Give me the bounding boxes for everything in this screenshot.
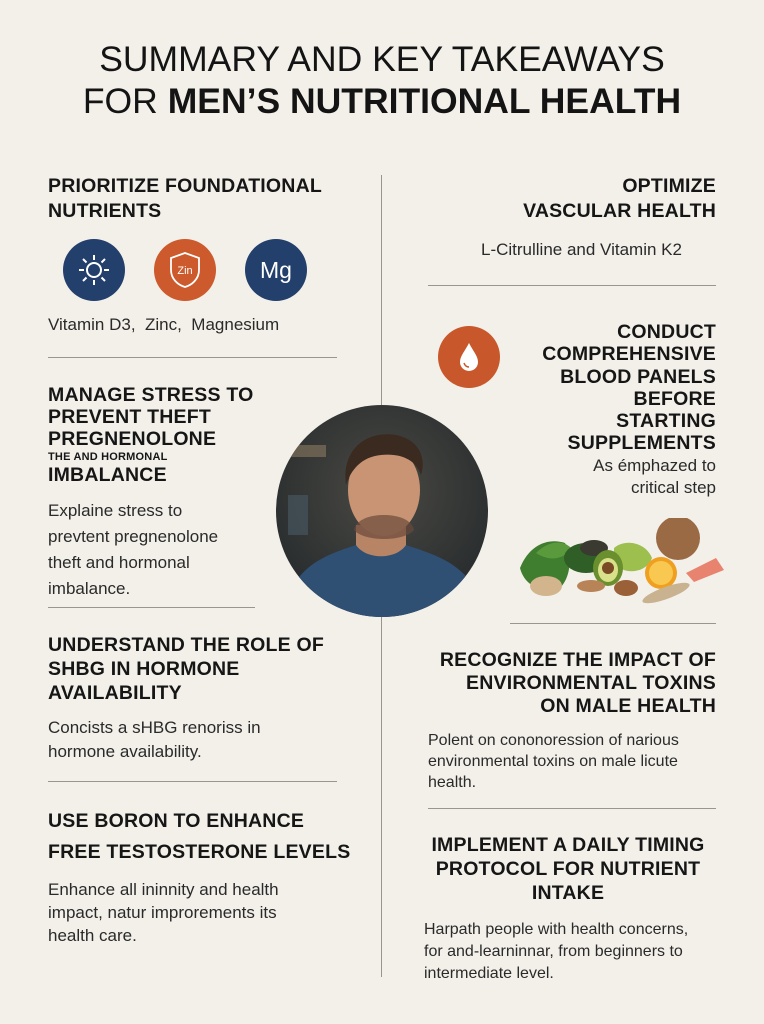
icon: magnesium bbox=[245, 239, 307, 301]
heading: ON MALE HEALTH bbox=[540, 695, 716, 717]
panel: daily timing bbox=[424, 834, 705, 982]
panel: manage stress bbox=[48, 384, 253, 598]
text: health. bbox=[428, 774, 476, 791]
icon: zinc bbox=[154, 239, 216, 301]
heading bbox=[440, 649, 716, 717]
text bbox=[48, 501, 218, 598]
text: critical step bbox=[631, 478, 716, 497]
text: Vitamin D3, Zinc, Magnesium bbox=[48, 315, 279, 334]
heading: RECOGNIZE THE IMPACT OF bbox=[440, 649, 716, 671]
text: theft and hormonal bbox=[48, 553, 190, 572]
heading bbox=[48, 810, 350, 863]
title bbox=[83, 39, 681, 121]
heading: AVAILABILITY bbox=[48, 682, 182, 704]
text: imbalance. bbox=[48, 579, 130, 598]
heading: BEFORE bbox=[634, 388, 716, 410]
heading: STARTING bbox=[616, 410, 716, 432]
text: L-Citrulline and Vitamin K2 bbox=[481, 240, 682, 259]
heading bbox=[431, 834, 705, 904]
icon: zinc: Zin bbox=[177, 265, 193, 277]
center divider bbox=[381, 175, 382, 977]
panel: foundational nutrients bbox=[48, 175, 322, 334]
heading: USE BORON TO ENHANCE bbox=[48, 810, 304, 832]
heading bbox=[523, 175, 716, 222]
panel: SHBG bbox=[48, 634, 324, 761]
heading: COMPREHENSIVE bbox=[542, 343, 716, 365]
text: Explaine stress to bbox=[48, 501, 182, 520]
text bbox=[48, 718, 261, 761]
heading: OPTIMIZE bbox=[622, 175, 716, 197]
heading: CONDUCT bbox=[617, 321, 716, 343]
heading bbox=[48, 634, 324, 704]
text: environmental toxins on male licute bbox=[428, 753, 678, 770]
heading: THE AND HORMONAL bbox=[48, 451, 168, 463]
text bbox=[428, 732, 679, 791]
text bbox=[593, 456, 716, 497]
heading: PROTOCOL FOR NUTRIENT bbox=[436, 858, 700, 880]
heading: ENVIRONMENTAL TOXINS bbox=[466, 672, 716, 694]
text: As émphazed to bbox=[593, 456, 716, 475]
icon: sun bbox=[63, 239, 125, 301]
heading: PRIORITIZE FOUNDATIONAL bbox=[48, 175, 322, 197]
heading: FREE TESTOSTERONE LEVELS bbox=[48, 841, 350, 863]
panel: boron bbox=[48, 810, 350, 945]
panel: environmental toxins bbox=[428, 649, 716, 791]
text: health care. bbox=[48, 926, 137, 945]
title: SUMMARY AND KEY TAKEAWAYS bbox=[99, 39, 665, 79]
food image bbox=[520, 518, 724, 604]
photo: man portrait bbox=[276, 405, 488, 617]
heading: UNDERSTAND THE ROLE OF bbox=[48, 634, 324, 656]
title: FOR MEN’S NUTRITIONAL HEALTH bbox=[83, 81, 681, 121]
icon: blood drop bbox=[438, 326, 500, 388]
heading: INTAKE bbox=[532, 882, 604, 904]
text: intermediate level. bbox=[424, 965, 554, 982]
heading: MANAGE STRESS TO bbox=[48, 384, 253, 406]
heading: VASCULAR HEALTH bbox=[523, 200, 716, 222]
text: prevtent pregnenolone bbox=[48, 527, 218, 546]
text: Polent on cononoression of narious bbox=[428, 732, 679, 749]
heading bbox=[48, 175, 322, 222]
heading: IMPLEMENT A DAILY TIMING bbox=[431, 834, 705, 856]
heading: SUPPLEMENTS bbox=[568, 432, 716, 454]
heading: SHBG IN HORMONE bbox=[48, 658, 240, 680]
text: for and-learninnar, from beginners to bbox=[424, 943, 683, 960]
icon: magnesium: Mg bbox=[260, 256, 292, 282]
heading bbox=[48, 384, 253, 486]
text: hormone availability. bbox=[48, 742, 202, 761]
text bbox=[48, 880, 279, 945]
heading: IMBALANCE bbox=[48, 464, 167, 486]
text: Enhance all ininnity and health bbox=[48, 880, 279, 899]
heading bbox=[542, 321, 716, 454]
heading: PREVENT THEFT bbox=[48, 406, 211, 428]
text: Harpath people with health concerns, bbox=[424, 921, 688, 938]
heading: BLOOD PANELS bbox=[560, 366, 716, 388]
text: Concists a sHBG renoriss in bbox=[48, 718, 261, 737]
text bbox=[424, 921, 688, 982]
panel: vascular health bbox=[481, 175, 716, 259]
heading: NUTRIENTS bbox=[48, 200, 161, 222]
heading: PREGNENOLONE bbox=[48, 428, 216, 450]
panel: blood panels bbox=[438, 321, 716, 497]
text: impact, natur improrements its bbox=[48, 903, 277, 922]
